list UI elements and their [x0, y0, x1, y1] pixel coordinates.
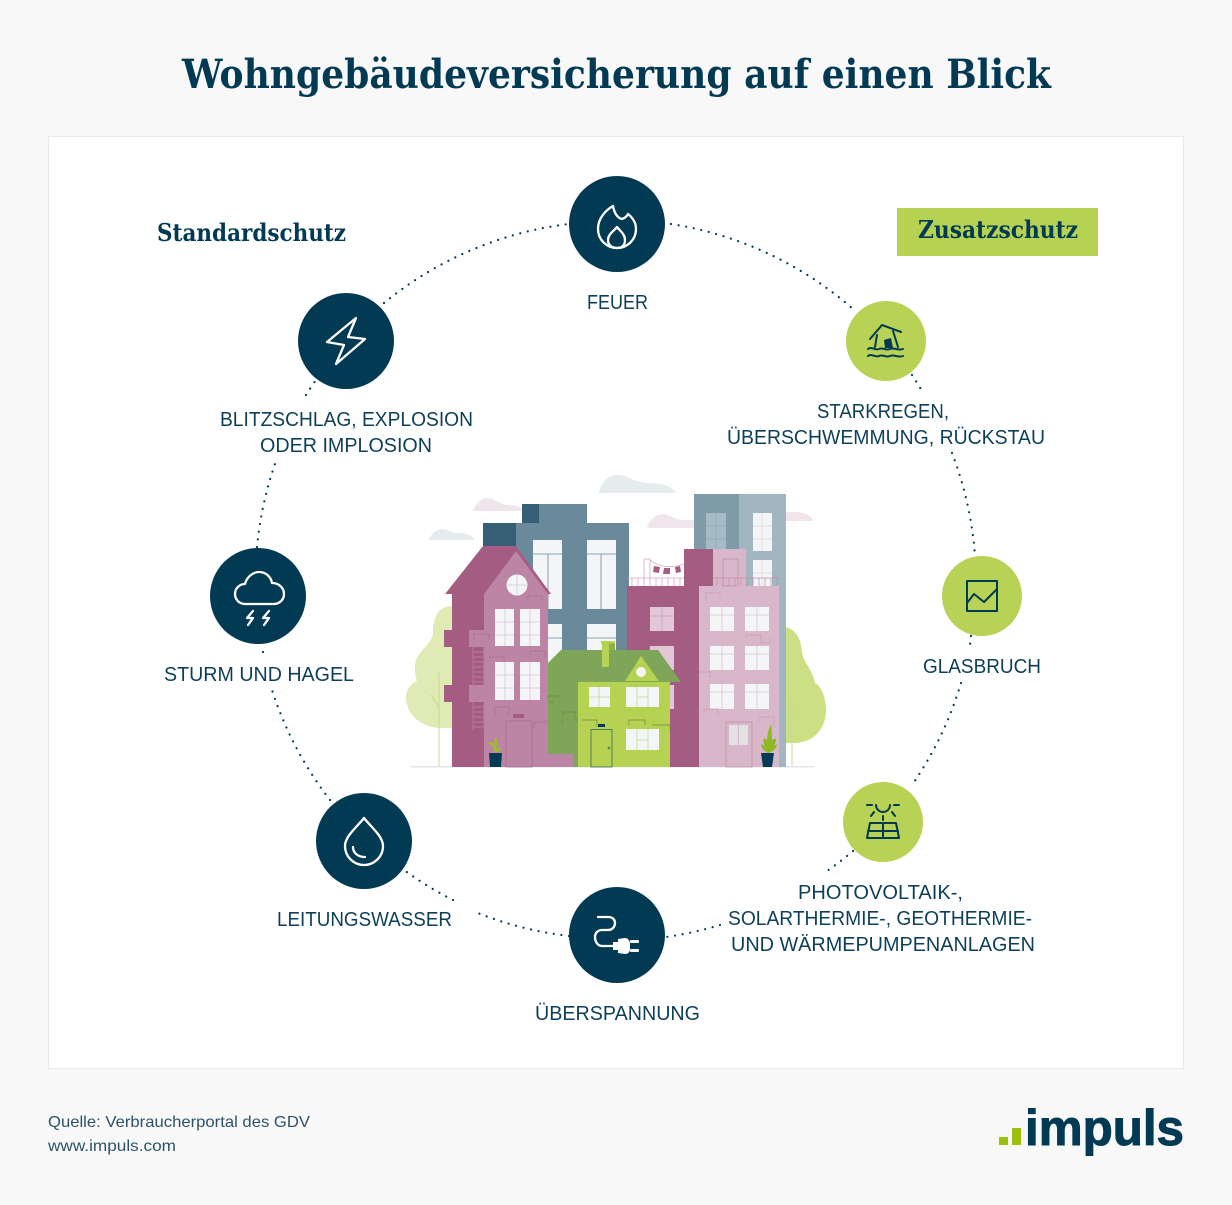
building: magenta mid [627, 549, 713, 767]
icon: solar panel [867, 805, 899, 838]
building: grey-blue tall right [694, 494, 786, 767]
icon: flooded house [868, 325, 903, 357]
item: Blitzschlag [220, 293, 473, 457]
item: Blitzschlag: ODER IMPLOSION [260, 435, 432, 457]
source note: Quelle: Verbraucherportal des GDV [48, 1114, 310, 1131]
source note: www.impuls.com [47, 1138, 176, 1155]
building: green house [548, 641, 681, 767]
dotted ring [257, 224, 975, 937]
plant: left pot [486, 737, 502, 767]
item: Feuer: FEUER [587, 292, 648, 314]
heading: Zusatzschutz badge: Zusatzschutz [918, 215, 1078, 244]
chimney [601, 641, 615, 667]
item: Starkregen: ÜBERSCHWEMMUNG, RÜCKSTAU [727, 427, 1045, 449]
icon: lightning bolt [327, 318, 365, 364]
panel: coverage overview [48, 136, 1184, 1068]
item: Überspannung: ÜBERSPANNUNG [535, 1003, 700, 1025]
item: Blitzschlag: BLITZSCHLAG, EXPLOSION [220, 409, 473, 431]
source note [47, 1114, 310, 1155]
icon: water drop [345, 818, 383, 865]
rooftop railing with laundry [628, 559, 684, 586]
building: blue centre [483, 504, 629, 669]
ground line [411, 766, 815, 768]
item: Glasbruch: GLASBRUCH [923, 656, 1041, 678]
item: Feuer [569, 176, 665, 314]
item: Leitungswasser: LEITUNGSWASSER [277, 909, 452, 931]
item: Leitungswasser [277, 793, 452, 931]
logo: impuls: impuls [1025, 1100, 1184, 1156]
building: pink narrow left [444, 546, 573, 767]
item: Starkregen [727, 301, 1045, 449]
illustration: houses [406, 475, 826, 768]
icon: broken glass pane [967, 581, 997, 611]
icon: power plug [595, 917, 639, 954]
icon: storm cloud [235, 572, 284, 625]
item: Photovoltaik: UND WÄRMEPUMPENANLAGEN [731, 934, 1035, 956]
building: light pink right [699, 549, 780, 767]
item: Photovoltaik: PHOTOVOLTAIK-, [798, 882, 963, 904]
item: Sturm und Hagel [164, 548, 354, 686]
item: Starkregen: STARKREGEN, [817, 401, 949, 423]
item: Glasbruch [923, 556, 1041, 678]
clouds [428, 475, 813, 540]
item: Sturm und Hagel: STURM UND HAGEL [164, 664, 354, 686]
item: Photovoltaik [728, 782, 1035, 956]
heading: Zusatzschutz badge [897, 208, 1098, 256]
item: Überspannung [535, 887, 700, 1025]
item: Photovoltaik: SOLARTHERMIE-, GEOTHERMIE- [728, 908, 1032, 930]
heading: Standardschutz: Standardschutz [157, 218, 346, 247]
trees [406, 606, 826, 767]
title: Wohngebäudeversicherung auf einen Blick [181, 51, 1052, 98]
icon: flame [598, 206, 636, 248]
plant: right pot [761, 724, 777, 767]
